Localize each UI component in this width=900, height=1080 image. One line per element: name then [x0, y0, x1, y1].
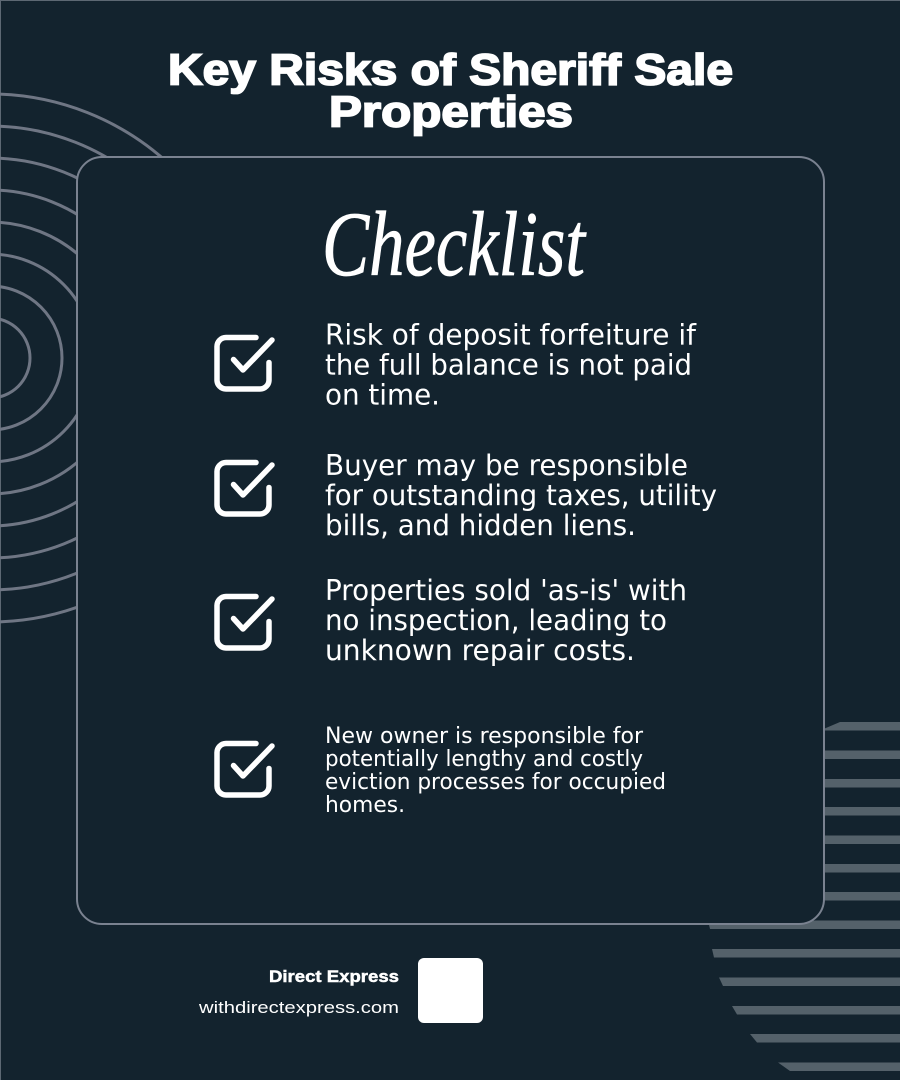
text: item 2: bills, and hidden liens.: [325, 509, 636, 542]
text: item 4: potentially lengthy and costly: [325, 746, 643, 772]
text: item 2: for outstanding taxes, utility: [325, 479, 717, 512]
item 2: [217, 449, 717, 542]
text: item 3: no inspection, leading to: [325, 604, 667, 637]
text: item 4: New owner is responsible for: [325, 723, 644, 749]
item 4: [217, 723, 666, 818]
text: item 4: [325, 723, 666, 818]
footer: brand text: withdirectexpress.com: [198, 998, 399, 1017]
text: item 2: [325, 449, 717, 542]
icon: checkbox 3: [217, 596, 272, 648]
item 3: [217, 574, 687, 667]
heading: Checklist: Checklist: [322, 193, 587, 295]
panel: checklist card: [77, 157, 824, 924]
text: item 2: Buyer may be responsible: [325, 449, 688, 482]
text: item 1: on time.: [325, 378, 440, 412]
text: item 1: [325, 318, 697, 412]
text: item 3: unknown repair costs.: [325, 634, 635, 667]
text: item 4: eviction processes for occupied: [325, 769, 666, 795]
decoration: concentric rings: [0, 94, 254, 622]
text: item 3: Properties sold 'as-is' with: [325, 574, 687, 607]
icon: checkbox 4: [217, 744, 272, 795]
text: item 3: [325, 574, 687, 667]
footer: brand text: [198, 967, 399, 1017]
decoration: striped shape: [708, 722, 900, 1071]
text: item 4: homes.: [325, 792, 405, 818]
title: [168, 46, 733, 136]
footer: logo placeholder: [418, 958, 483, 1023]
item 1: [217, 318, 697, 412]
title: Properties: [329, 88, 573, 136]
footer: brand text: Direct Express: [269, 967, 399, 986]
icon: checkbox 1: [217, 338, 272, 389]
text: item 1: the full balance is not paid: [325, 348, 692, 382]
text: item 1: Risk of deposit forfeiture if: [325, 318, 697, 352]
icon: checkbox 2: [217, 462, 272, 514]
title: Key Risks of Sheriff Sale: [168, 46, 733, 94]
